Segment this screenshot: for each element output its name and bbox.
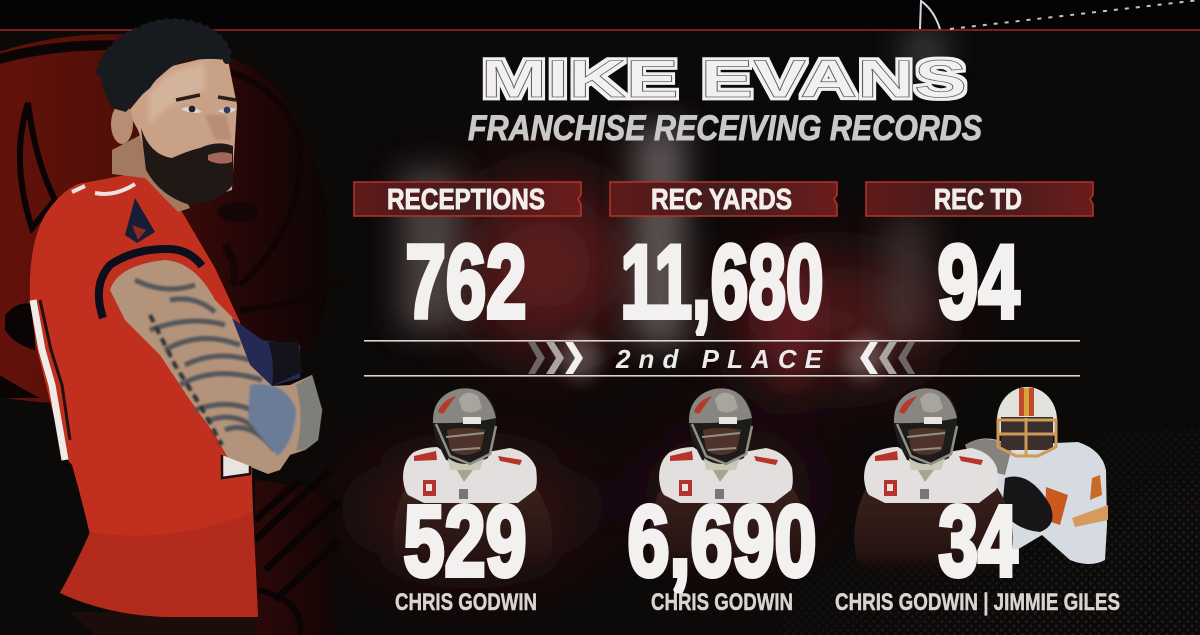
shoulder number xyxy=(72,184,135,194)
stat: 762 receptions: 762 xyxy=(406,224,526,340)
name: Chris Godwin: CHRIS GODWIN xyxy=(395,589,537,616)
stat: 529 second place receptions: 529 xyxy=(404,486,526,598)
jersey hem detail xyxy=(222,455,250,478)
top bar xyxy=(0,0,1200,31)
stat: 6,690 second place yards: 6,690 xyxy=(628,486,816,598)
title: MIKE EVANS xyxy=(481,50,967,109)
icon: team logo watermark xyxy=(0,34,345,635)
panel: rec yards header: REC YARDS xyxy=(651,184,792,216)
name: Chris Godwin: CHRIS GODWIN xyxy=(651,589,793,616)
divider: 2nd place band: 2nd PLACE xyxy=(615,344,823,374)
background xyxy=(328,31,1200,635)
icon: shoulder patch xyxy=(125,198,155,243)
panel: receptions header: RECEPTIONS xyxy=(387,184,545,216)
player: Chris Godwin receiving yards xyxy=(649,388,808,580)
mouth xyxy=(208,152,232,164)
eyes and brows xyxy=(176,95,237,113)
subtitle: FRANCHISE RECEIVING RECORDS xyxy=(468,109,982,148)
hair xyxy=(100,22,228,112)
stat: 11,680 receiving yards: 11,680 xyxy=(620,224,824,340)
shorts xyxy=(70,612,258,635)
arrow: right chevrons xyxy=(860,342,915,374)
player: Jimmie Giles xyxy=(965,387,1108,564)
panel: rec td header xyxy=(866,182,1093,216)
face xyxy=(128,58,237,200)
neck xyxy=(112,130,190,212)
stat: 94 receiving touchdowns: 94 xyxy=(938,224,1020,340)
sleeve xyxy=(99,249,202,318)
arm xyxy=(110,260,322,474)
name: Chris Godwin and Jimmie Giles: CHRIS GODWIN | JIMMIE GILES xyxy=(835,589,1120,616)
panel: rec yards header xyxy=(610,182,837,216)
player: Chris Godwin touchdowns xyxy=(854,388,1013,580)
arrow: left chevrons xyxy=(528,342,583,374)
jersey xyxy=(30,172,258,617)
stat: 34 second place touchdowns: 34 xyxy=(938,486,1018,598)
panel: rec td header: REC TD xyxy=(934,184,1022,216)
beard xyxy=(141,128,233,205)
player: Mike Evans xyxy=(30,22,322,635)
player: Chris Godwin receptions xyxy=(393,388,552,580)
divider: 2nd place band xyxy=(364,336,1080,380)
ear xyxy=(111,104,133,144)
glove xyxy=(232,318,300,386)
